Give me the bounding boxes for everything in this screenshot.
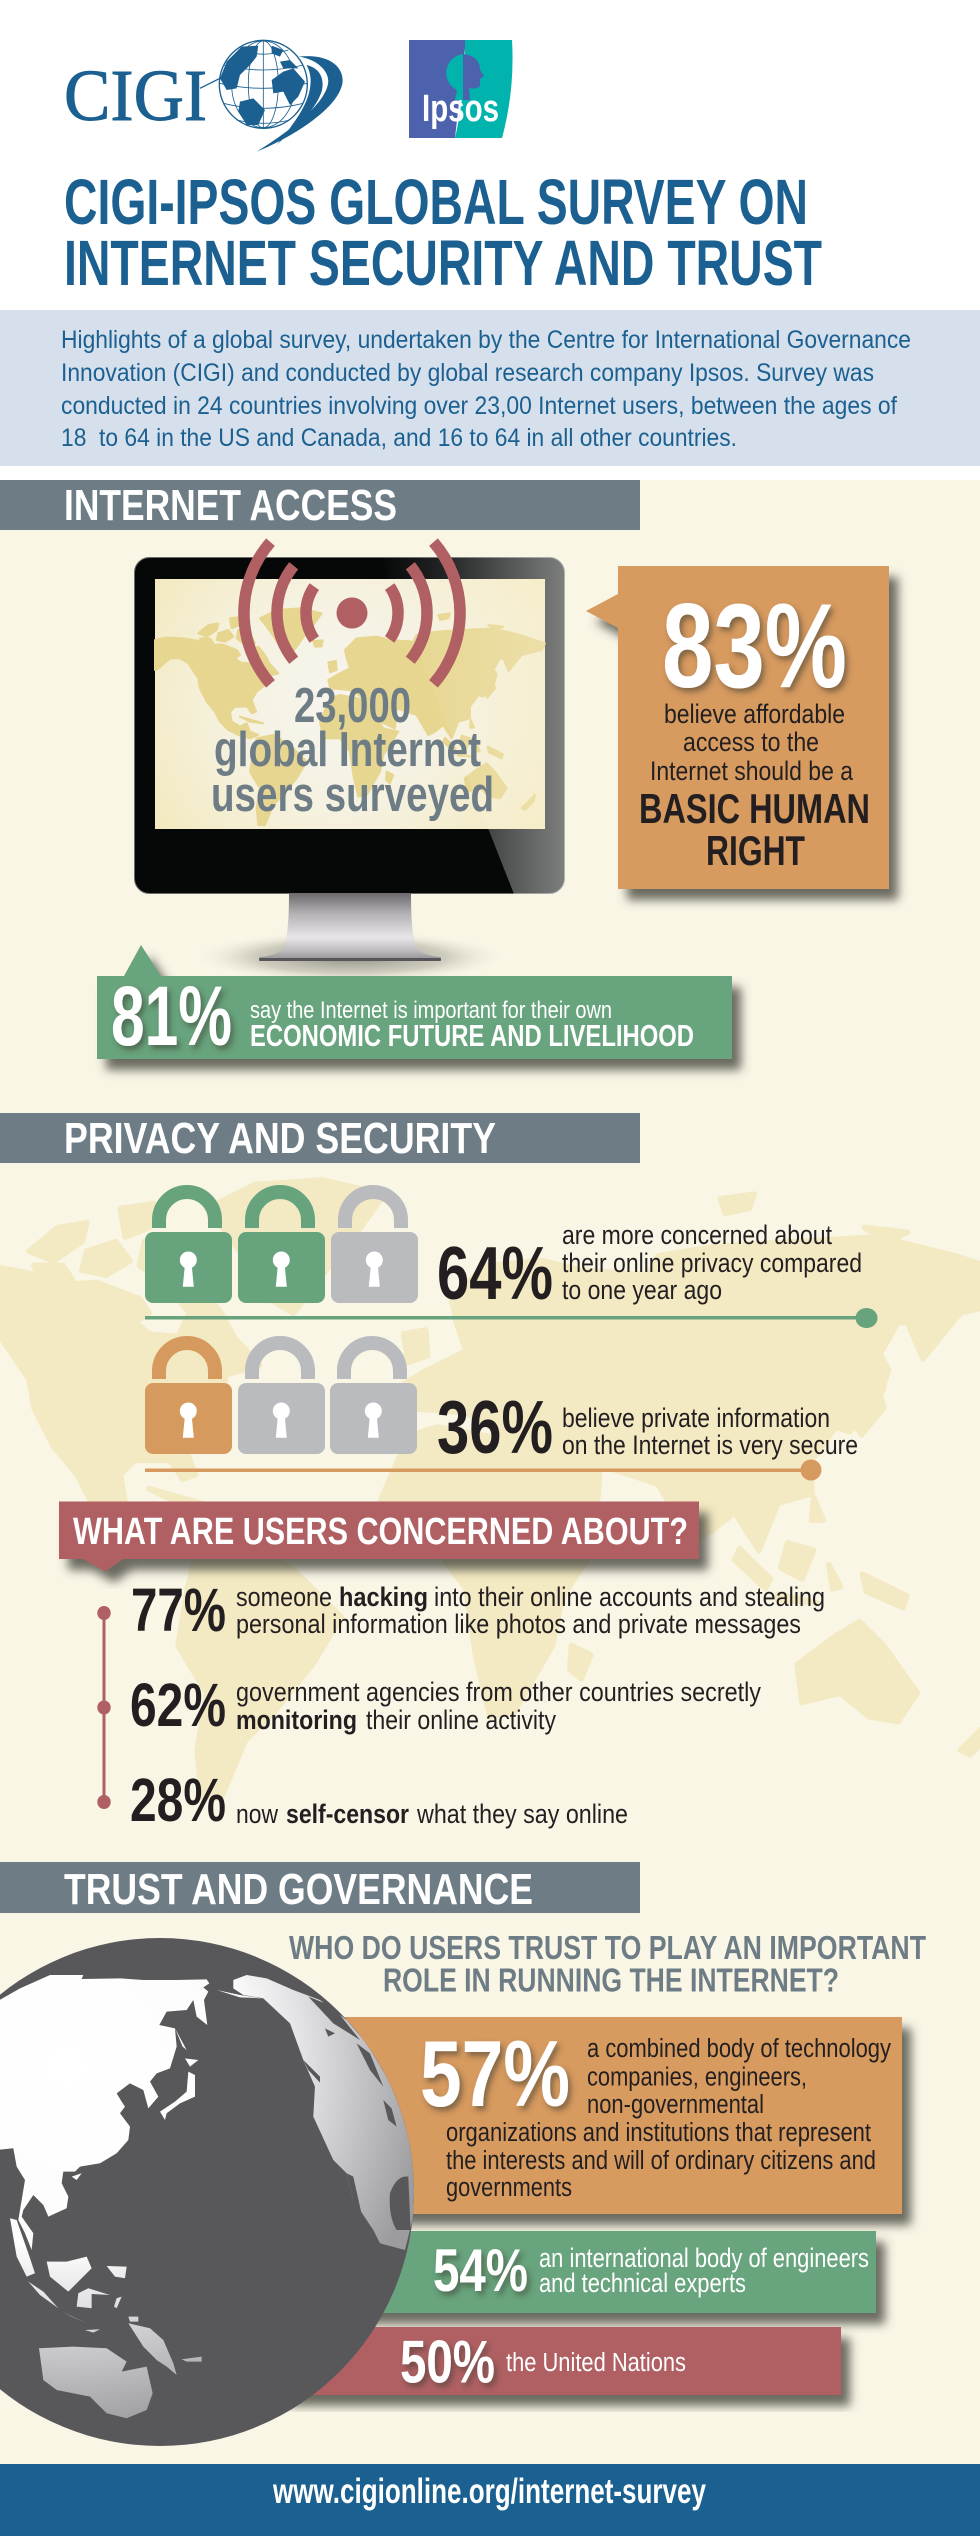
footer <box>0 2464 980 2536</box>
banner: what are users concerned about: WHAT ARE USERS CONCERNED ABOUT? <box>73 1511 688 1553</box>
concern: 62% monitoring: their online activity <box>366 1705 557 1735</box>
icon: desktop monitor <box>134 542 565 984</box>
concern: 28% self-censor: self-censor <box>286 1799 409 1829</box>
stat: 57%: non-governmental <box>587 2091 764 2119</box>
concern: 77% hacking: someone <box>236 1582 332 1612</box>
icon: wireless signal <box>244 542 460 684</box>
monitor stand <box>259 894 441 961</box>
intro panel: Innovation (CIGI) and conducted by global research company Ipsos. Survey was <box>61 359 874 387</box>
concern: 77% hacking: 77% <box>131 1576 226 1644</box>
green banner <box>97 945 732 1059</box>
section heading: Trust and governance: TRUST AND GOVERNANCE <box>64 1865 533 1914</box>
screen text <box>211 679 494 822</box>
orange rule with dot <box>145 1460 822 1480</box>
concern: 62% monitoring: government agencies from other countries secretly <box>236 1677 762 1707</box>
monitor body <box>134 558 564 894</box>
stat: 50% <box>400 2328 686 2396</box>
subheading: who do users trust <box>289 1929 926 1998</box>
description: their online privacy compared <box>562 1248 862 1278</box>
timeline <box>97 1606 111 1809</box>
logo: CIGI <box>64 40 343 152</box>
bar: green 54% <box>280 2231 876 2313</box>
background world map <box>0 1180 980 1798</box>
stat: 57%: a combined body of technology <box>587 2035 891 2063</box>
logo: Ipsos: Ipsos <box>422 88 499 130</box>
bar: orange 57% <box>280 2017 902 2214</box>
callout: 81% economic future <box>97 945 732 1063</box>
screen text: users surveyed <box>211 768 494 822</box>
stat: 57% <box>420 2021 891 2202</box>
banner text: say the Internet is important for their own <box>250 997 612 1024</box>
monitor bezel sheen <box>381 557 565 894</box>
stat: 50%: 50% <box>400 2328 495 2396</box>
stat: 54%: and technical experts <box>539 2268 746 2298</box>
icon: grey lock <box>330 1343 417 1454</box>
intro panel <box>0 310 980 466</box>
callout text: believe affordable <box>664 699 845 729</box>
stat: 57%: governments <box>446 2174 572 2202</box>
logo: Ipsos <box>409 40 513 138</box>
concern: 62% monitoring: monitoring <box>236 1705 357 1735</box>
callout text <box>650 699 853 786</box>
monitor floor shadow <box>190 930 510 984</box>
callout emphasis <box>639 785 870 874</box>
icon: globe <box>0 1938 415 2446</box>
screen text: global Internet <box>214 723 481 777</box>
callout: 83% basic human right <box>586 566 889 889</box>
concern: 28% self-censor: 28% <box>130 1766 226 1834</box>
stat: 54% <box>433 2237 869 2304</box>
description <box>562 1220 862 1305</box>
intro panel: conducted in 24 countries involving over 23,00 Internet users, between the ages of <box>61 392 897 420</box>
banner: what are users concerned about <box>59 1502 699 1572</box>
subheading: who do users trust: ROLE IN RUNNING THE INTERNET? <box>383 1962 839 1998</box>
section heading: Internet access <box>0 480 640 530</box>
concern: 77% hacking <box>131 1576 825 1644</box>
percentage: 36% <box>437 1385 553 1469</box>
section heading: Privacy and security: PRIVACY AND SECURITY <box>64 1114 496 1163</box>
callout text: access to the <box>683 727 819 757</box>
stat: 54%: an international body of engineers <box>539 2243 869 2273</box>
concern: 62% monitoring <box>130 1671 762 1739</box>
stat: 57%: 57% <box>420 2021 570 2126</box>
icon: orange lock <box>145 1343 232 1454</box>
intro panel: 18 to 64 in the US and Canada, and 16 to 64 in all other countries. <box>61 424 737 452</box>
icon: green lock <box>238 1192 325 1303</box>
description <box>562 1403 858 1460</box>
big number: 81% <box>111 969 232 1063</box>
screen glass reflection <box>390 579 545 829</box>
icon: grey lock <box>238 1343 325 1454</box>
callout box <box>586 566 889 889</box>
concern: 62% monitoring: 62% <box>130 1671 226 1739</box>
stat: 57%: companies, engineers, <box>587 2064 807 2092</box>
section heading: Internet access: INTERNET ACCESS <box>64 481 397 530</box>
bar: red 50% <box>280 2327 841 2395</box>
concern: 77% hacking: into their online accounts and stealing <box>434 1582 825 1612</box>
section background <box>0 480 980 2464</box>
callout text: Internet should be a <box>650 756 853 786</box>
concern: 28% self-censor: what they say online <box>416 1799 628 1829</box>
screen text: 23,000 <box>294 679 411 733</box>
stat: 54%: 54% <box>433 2237 528 2304</box>
concern: 77% hacking: hacking <box>339 1582 428 1612</box>
green rule with dot <box>145 1308 878 1328</box>
description: on the Internet is very secure <box>562 1430 858 1460</box>
percentage: 64% <box>437 1231 553 1315</box>
icon: green lock <box>145 1192 232 1303</box>
stat: 64% privacy <box>145 1192 878 1328</box>
stat: 50%: the United Nations <box>506 2349 686 2377</box>
stat: 57%: organizations and institutions that represent <box>446 2119 871 2147</box>
icon: grey lock <box>331 1192 418 1303</box>
description: believe private information <box>562 1403 830 1433</box>
banner emphasis: ECONOMIC FUTURE AND LIVELIHOOD <box>250 1018 694 1053</box>
monitor screen <box>155 579 545 829</box>
description: are more concerned about <box>562 1220 833 1250</box>
stat: 57%: the interests and will of ordinary citizens and <box>446 2147 876 2175</box>
title <box>64 166 822 299</box>
screen world map <box>155 608 545 825</box>
callout emphasis: BASIC HUMAN <box>639 785 870 832</box>
description: to one year ago <box>562 1275 722 1305</box>
callout emphasis: RIGHT <box>706 827 805 874</box>
concern: 28% self-censor: now <box>236 1799 279 1829</box>
monitor base edge <box>259 958 441 961</box>
footer: www.cigionline.org/internet-survey <box>272 2472 706 2511</box>
logo: CIGI: CIGI <box>64 55 207 136</box>
stat: 36% security <box>145 1343 858 1480</box>
concern: 77% hacking: personal information like photos and private messages <box>236 1609 801 1639</box>
concern: 28% self-censor <box>130 1766 628 1834</box>
intro panel: Highlights of a global survey, undertaken by the Centre for International Governance <box>61 326 911 354</box>
big number: 83% <box>662 579 847 713</box>
